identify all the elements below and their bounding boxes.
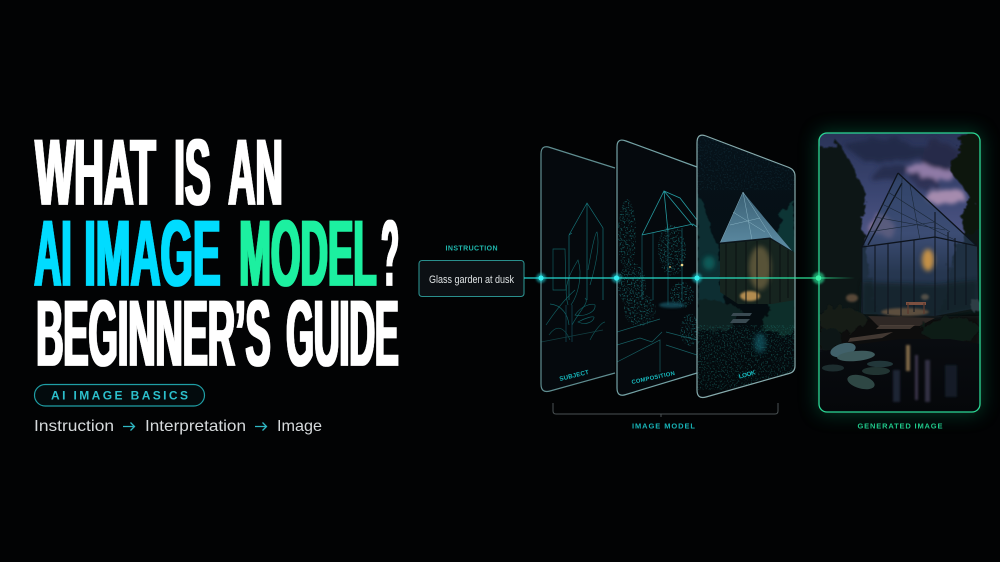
label: look: LOOK [738,369,757,381]
panel: composition [617,140,700,395]
title line: AI Image Model?: AI [34,201,72,306]
clouds and dusk light [850,139,965,234]
glass roof [720,192,793,252]
label: generated image: GENERATED IMAGE [858,422,942,430]
panel outline [697,135,795,398]
green glow [817,131,982,414]
glasshouse frame [862,173,977,316]
rendered glasshouse scene [697,135,795,390]
arrow [255,422,266,430]
sketch: glasshouse and garden [617,191,700,372]
title [34,120,399,386]
pill: AI image basics: AI IMAGE BASICS [51,388,188,402]
connector beam [524,272,855,284]
title line: Beginner's Guide: BEGINNER’S [36,281,271,386]
instruction box [419,260,524,296]
steps [848,325,915,342]
process line: instruction, interpretation, image: Instruction [34,418,114,435]
pond [820,339,980,373]
title line: AI Image Model?: IMAGE [84,201,221,306]
lit interior [720,239,795,304]
node: composition [612,273,622,283]
sky [820,134,976,352]
text: GUIDE [286,281,399,386]
generated image [815,125,985,414]
speckled foliage [618,199,700,346]
node: subject [536,273,546,283]
node: generated image [812,272,824,284]
title line: What is an: IS [174,120,211,225]
glasshouse glass [861,173,978,316]
sketch: house and plants [541,203,605,342]
node: look [692,273,702,283]
bracket: image model [553,403,778,417]
pill: AI image basics [34,384,204,406]
label: composition: COMPOSITION [631,371,675,386]
process line: instruction, interpretation, image: Interpretation [145,418,246,435]
scene [815,125,985,412]
instruction label: INSTRUCTION [446,246,498,252]
text: ? [381,201,399,306]
panel outline [617,140,697,395]
arrow [123,422,134,430]
terrace and seating [846,294,935,326]
steps [730,313,752,323]
panel: subject [541,147,615,392]
title: AN [228,120,283,225]
title line: Beginner's Guide [36,281,399,386]
label: subject: SUBJECT [559,369,590,383]
water sparkle [697,325,795,390]
label: image model: IMAGE MODEL [632,422,695,430]
shrubs [818,299,981,352]
panel: look [697,135,795,398]
trees [820,134,980,318]
foliage mass [819,316,980,350]
instruction box: Glass garden at dusk [429,274,514,286]
process line: instruction, interpretation, image [34,418,322,435]
text: MODEL [239,201,377,306]
process line: instruction, interpretation, image: Image [277,418,322,435]
lily pads [822,340,893,392]
trees [697,190,795,335]
title line: What is an: WHAT [35,120,156,225]
reflections [893,345,957,402]
panel outline [541,147,615,392]
green frame [819,133,980,412]
